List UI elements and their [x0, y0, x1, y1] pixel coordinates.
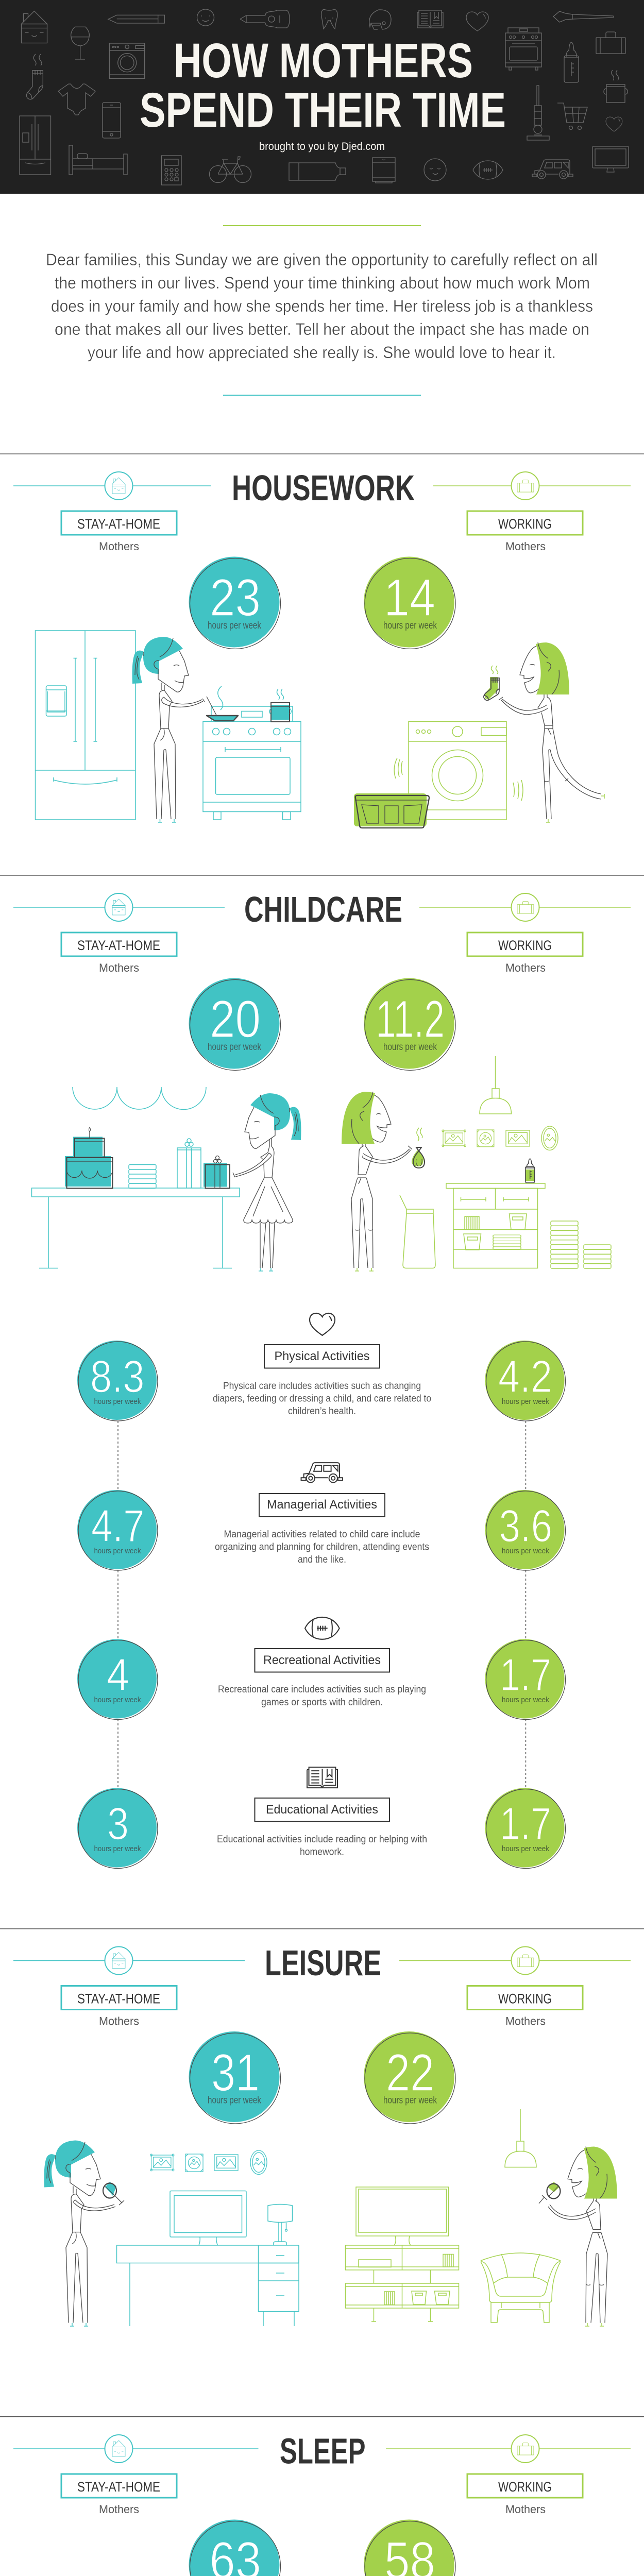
scene: fridge [35, 631, 135, 820]
dashed connectors [118, 1421, 526, 1788]
stat: educational working 1.7 [485, 1788, 566, 1868]
label stay-at-home [61, 511, 177, 553]
label working: Mothers [505, 961, 546, 974]
stat: educational stay-at-home 3: hours per week [94, 1844, 141, 1853]
label stay-at-home: STAY-AT-HOME [77, 938, 160, 953]
stat: 20 hours stay-at-home: hours per week [208, 1042, 261, 1053]
recreational activities label: Recreational Activities [263, 1653, 381, 1667]
section: childcare [0, 875, 644, 1071]
stat: managerial stay-at-home 4.7: 4.7 [91, 1500, 144, 1551]
stat: managerial stay-at-home 4.7: hours per week [94, 1547, 141, 1555]
figure: working mother with diaper [342, 1092, 412, 1271]
icon: jeep [301, 1463, 343, 1483]
educational activities description: Educational activities include reading or helping with [217, 1834, 427, 1845]
label working: WORKING [498, 1991, 552, 2006]
label working: WORKING [498, 516, 552, 532]
stat: managerial stay-at-home 4.7 [77, 1490, 158, 1570]
label working: Mothers [505, 2014, 546, 2028]
wall frames [150, 2150, 267, 2174]
educational activities description: homework. [300, 1846, 344, 1858]
stat: physical working 4.2: hours per week [502, 1397, 549, 1406]
label stay-at-home [61, 933, 177, 974]
icon: bowl with spatula [207, 686, 238, 721]
heading row: LEISURE [265, 1943, 381, 1983]
intro text: Dear families, this Sunday we are given the opportunity to carefully reflect on all [46, 250, 598, 269]
stat: recreational stay-at-home 4: 4 [107, 1649, 129, 1700]
intro text: does in your family and how she spends her time. Her tireless job is a thankless [51, 297, 593, 315]
figure: mother with gift [233, 1093, 301, 1271]
stat: 22 hours working: hours per week [383, 2095, 437, 2106]
stat: 11.2 hours working: 11.2 [376, 990, 445, 1048]
stat: 23 hours stay-at-home: hours per week [208, 620, 261, 631]
heading row: SLEEP [280, 2431, 366, 2471]
icon: football [305, 1617, 340, 1639]
header banner [0, 0, 644, 194]
stat: 14 hours working: hours per week [383, 620, 437, 631]
physical activities label [264, 1345, 380, 1368]
stat: recreational stay-at-home 4: hours per week [94, 1696, 141, 1704]
stat: 31 hours stay-at-home: hours per week [208, 2095, 261, 2106]
stat: managerial working 3.6: hours per week [502, 1547, 549, 1555]
managerial activities description: Managerial activities related to child care include [224, 1529, 420, 1540]
icon: towel stacks [551, 1221, 611, 1268]
icon: open book [307, 1767, 337, 1788]
scene: bunting [73, 1087, 206, 1110]
scene: party table [32, 1188, 240, 1268]
heading row [13, 889, 631, 929]
label stay-at-home [61, 1986, 177, 2028]
intro text: the mothers in our lives. Spend your time thinking about how much work Mom [55, 274, 590, 292]
stat: 31 hours stay-at-home [189, 2031, 280, 2124]
intro text: one that makes all our lives better. Tell her about the impact she has made on [55, 320, 589, 338]
panel: childcare breakdown [77, 1313, 566, 1868]
title: HOW MOTHERS [174, 33, 473, 88]
scene: desk [116, 2245, 299, 2326]
physical activities description: Physical care includes activities such as changing [223, 1381, 421, 1392]
stat: 23 hours stay-at-home: 23 [210, 568, 261, 627]
label working [467, 1986, 583, 2028]
stat: recreational stay-at-home 4 [77, 1639, 158, 1720]
icon: baby bottle [526, 1159, 535, 1183]
icon: desk lamp [268, 2204, 293, 2245]
stat: 22 hours working [364, 2031, 455, 2124]
scene: ceiling lamp [505, 2109, 536, 2167]
scene: stove [203, 706, 301, 820]
icon: heart [310, 1313, 335, 1335]
label stay-at-home: Mothers [99, 2014, 139, 2028]
stat: 11.2 hours working: hours per week [383, 1042, 437, 1053]
stat: 58 hours working [364, 2519, 455, 2576]
icon: armchair [481, 2253, 561, 2323]
icon: small gift [204, 1156, 230, 1188]
icon: stacked towels [129, 1164, 156, 1188]
stat: educational stay-at-home 3: 3 [107, 1798, 129, 1849]
label stay-at-home: STAY-AT-HOME [77, 2479, 160, 2495]
recreational activities label [255, 1649, 389, 1672]
heading row [13, 2431, 631, 2471]
icon: birthday cake [65, 1127, 112, 1188]
label working [467, 2474, 583, 2516]
label working: Mothers [505, 540, 546, 553]
label working [467, 933, 583, 974]
heading row [13, 468, 631, 508]
managerial activities label [259, 1494, 385, 1517]
stat: educational working 1.7: 1.7 [500, 1798, 551, 1849]
managerial activities description: organizing and planning for children, attending events [215, 1541, 429, 1553]
stat: physical working 4.2: 4.2 [498, 1351, 552, 1402]
physical activities description: diapers, feeding or dressing a child, and care related to [213, 1393, 431, 1404]
heading row: HOUSEWORK [232, 468, 415, 508]
stat: physical stay-at-home 8.3: 8.3 [90, 1351, 144, 1402]
scene: washing machine [394, 721, 523, 820]
label working: Mothers [505, 2503, 546, 2516]
stat: educational working 1.7: hours per week [502, 1844, 549, 1853]
header icons [20, 9, 629, 185]
label stay-at-home: Mothers [99, 2503, 139, 2516]
accent rule green [223, 225, 421, 226]
managerial activities label: Managerial Activities [267, 1498, 377, 1512]
stat: 20 hours stay-at-home [189, 978, 280, 1071]
stat: physical stay-at-home 8.3 [77, 1341, 158, 1421]
title: SPEND THEIR TIME [140, 83, 506, 138]
label stay-at-home: STAY-AT-HOME [77, 516, 160, 532]
section: leisure [0, 1928, 644, 2124]
stat: managerial working 3.6: 3.6 [499, 1500, 552, 1551]
stat: 63 hours stay-at-home [189, 2519, 280, 2576]
stat: 14 hours working [364, 556, 455, 649]
icon: diaper pouch [412, 1128, 425, 1168]
stat: physical working 4.2 [485, 1341, 566, 1421]
heading row [13, 1943, 631, 1983]
stat: recreational working 1.7 [485, 1639, 566, 1720]
stat: recreational working 1.7: 1.7 [500, 1649, 551, 1700]
wall frames [442, 1126, 558, 1150]
stat: 11.2 hours working [364, 978, 455, 1071]
recreational activities description: games or sports with children. [261, 1697, 383, 1708]
icon: pot with steam [269, 689, 291, 722]
intro text: your life and how appreciated she really is. She would love to hear it. [88, 343, 556, 362]
recreational activities description: Recreational care includes activities such as playing [218, 1684, 426, 1695]
label working: WORKING [498, 938, 552, 953]
stat: educational stay-at-home 3 [77, 1788, 158, 1868]
icon: tall gift [177, 1139, 201, 1188]
byline: brought to you by Djed.com [259, 141, 385, 152]
scene: desk monitor [170, 2191, 246, 2245]
icon: sock with steam [484, 666, 499, 700]
figure: working mother with sock [499, 642, 604, 822]
label stay-at-home: STAY-AT-HOME [77, 1991, 160, 2006]
label working: WORKING [498, 2479, 552, 2495]
label stay-at-home: Mothers [99, 961, 139, 974]
stat: 31 hours stay-at-home: 31 [211, 2043, 260, 2102]
stat: recreational working 1.7: hours per week [502, 1696, 549, 1704]
accent rule teal [223, 395, 421, 396]
stat: 14 hours working: 14 [384, 568, 435, 627]
figure: working mother with wine [539, 2146, 617, 2326]
scene: dresser [446, 1183, 545, 1268]
section: sleep [0, 2416, 644, 2576]
icon: pendant lamp [480, 1056, 511, 1114]
physical activities label: Physical Activities [274, 1349, 370, 1363]
label working [467, 511, 583, 553]
figure: mother with wine [44, 2140, 124, 2326]
scene: tv and shelves [345, 2187, 459, 2321]
icon: trash can [400, 1195, 435, 1268]
stat: 23 hours stay-at-home [189, 556, 280, 649]
section: housework [0, 453, 644, 649]
educational activities label: Educational Activities [266, 1803, 378, 1817]
physical activities description: children’s health. [288, 1406, 356, 1417]
label stay-at-home [61, 2474, 177, 2516]
stat: managerial working 3.6 [485, 1490, 566, 1570]
stat: 20 hours stay-at-home: 20 [210, 990, 261, 1048]
icon: laundry basket [354, 793, 429, 828]
stat: 22 hours working: 22 [386, 2043, 434, 2102]
label stay-at-home: Mothers [99, 540, 139, 553]
managerial activities description: and the like. [298, 1554, 346, 1565]
stat: physical stay-at-home 8.3: hours per week [94, 1397, 141, 1406]
educational activities label [255, 1798, 389, 1822]
figure: mother cooking [132, 637, 205, 822]
heading row: CHILDCARE [244, 889, 402, 929]
